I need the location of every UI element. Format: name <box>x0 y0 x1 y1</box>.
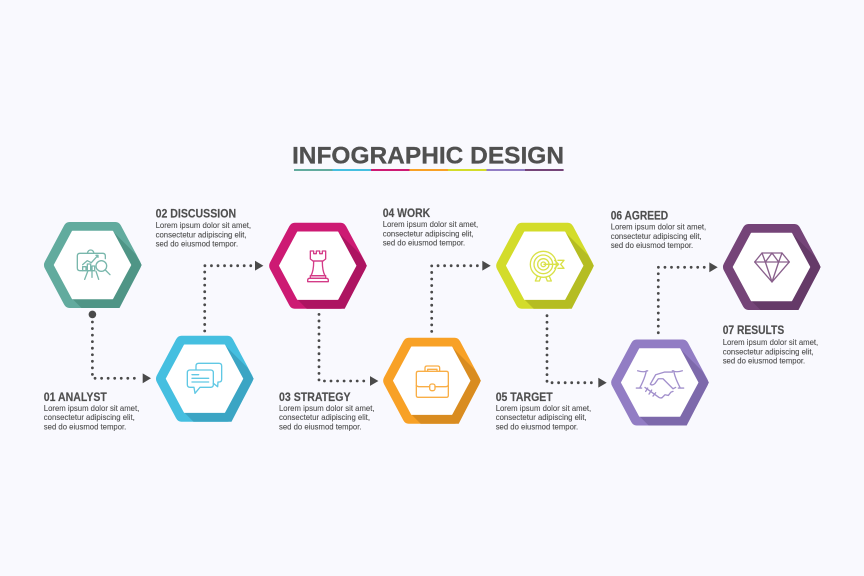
text: 07 results: sed do eiusmod tempor. <box>723 357 805 366</box>
title: INFOGRAPHIC DESIGN <box>292 142 564 170</box>
text: 03 strategy: 03 STRATEGY <box>279 391 351 404</box>
text: 05 target: 05 TARGET <box>496 391 553 404</box>
connector: 01 to 02 <box>89 311 151 383</box>
connector: 04 to 05 <box>432 261 491 331</box>
text: 05 target: Lorem ipsum dolor sit amet, <box>496 404 591 413</box>
text: 06 agreed: consectetur adipiscing elit, <box>611 232 702 241</box>
text: 02 discussion: sed do eiusmod tempor. <box>156 240 238 249</box>
text: 05 target: sed do eiusmod tempor. <box>496 422 578 431</box>
title underline: seven colour segments <box>294 169 564 171</box>
icon: chess rook <box>308 251 328 282</box>
hexagon 04: work <box>383 338 481 424</box>
connector: 02 to 03 <box>205 261 263 331</box>
text: 07 results: 07 RESULTS <box>723 324 784 337</box>
text: 04 work: sed do eiusmod tempor. <box>383 239 465 248</box>
hexagon 05: target <box>496 223 594 309</box>
text: 02 discussion: consectetur adipiscing elit, <box>156 230 247 239</box>
icon: presentation board with magnifier <box>77 250 110 279</box>
hexagon 06: agreed <box>611 340 709 426</box>
text: 02 discussion: 02 DISCUSSION <box>156 208 236 221</box>
text: 06 agreed: sed do eiusmod tempor. <box>611 241 693 250</box>
text: 01 analyst: 01 ANALYST <box>44 391 107 404</box>
text: 01 analyst: consectetur adipiscing elit, <box>44 413 135 422</box>
connector: 05 to 06 <box>547 316 607 388</box>
text: 01 analyst <box>44 391 139 431</box>
icon: briefcase <box>416 366 448 397</box>
icon: speech bubbles <box>187 363 222 393</box>
text: 02 discussion <box>156 208 251 249</box>
text: 03 strategy: Lorem ipsum dolor sit amet, <box>279 404 374 413</box>
text: 01 analyst: sed do eiusmod tempor. <box>44 422 126 431</box>
connector: 06 to 07 <box>658 262 718 333</box>
connector: 03 to 04 <box>319 314 378 386</box>
text: 04 work: consectetur adipiscing elit, <box>383 229 474 238</box>
text: 03 strategy: sed do eiusmod tempor. <box>279 422 362 431</box>
icon: target with arrow <box>530 251 564 281</box>
text: 06 agreed: 06 AGREED <box>611 209 668 222</box>
text: 07 results: Lorem ipsum dolor sit amet, <box>723 338 818 347</box>
icon: handshake <box>636 371 684 398</box>
text: 07 results <box>723 324 818 366</box>
text: 04 work: Lorem ipsum dolor sit amet, <box>383 220 478 229</box>
text: 01 analyst: Lorem ipsum dolor sit amet, <box>44 404 139 413</box>
icon: diamond <box>755 253 789 282</box>
text: 07 results: consectetur adipiscing elit, <box>723 347 814 356</box>
text: 02 discussion: Lorem ipsum dolor sit amet, <box>156 221 251 230</box>
hexagon 01: analyst <box>44 222 142 308</box>
text: 06 agreed: Lorem ipsum dolor sit amet, <box>611 223 706 232</box>
hexagon 03: strategy <box>269 223 367 309</box>
text: 04 work: 04 WORK <box>383 207 431 220</box>
text: 06 agreed <box>611 209 706 250</box>
hexagon 02: discussion <box>156 336 254 422</box>
text: 03 strategy: consectetur adipiscing elit, <box>279 413 370 422</box>
text: 05 target <box>496 391 591 431</box>
text: 05 target: consectetur adipiscing elit, <box>496 413 587 422</box>
hexagon 07: results <box>723 224 821 310</box>
text: 04 work <box>383 207 478 248</box>
text: 03 strategy <box>279 391 374 431</box>
